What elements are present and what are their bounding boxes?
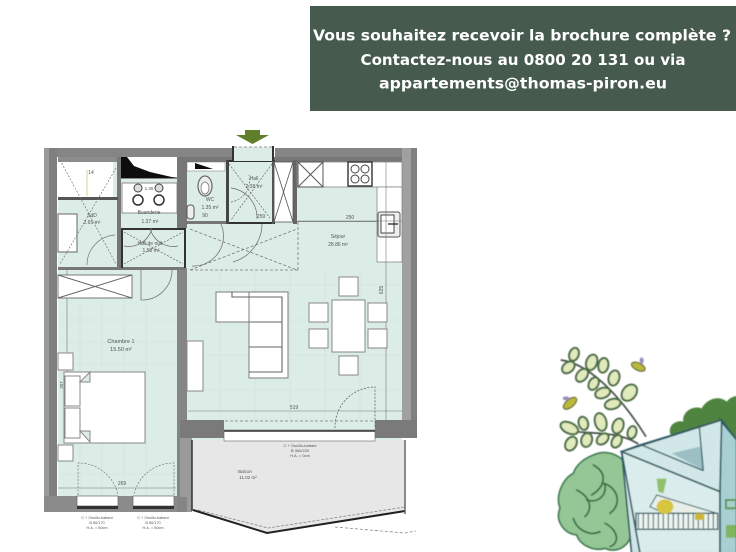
room labels: 259: [257, 214, 265, 220]
dimension lines: [58, 160, 402, 488]
shower room fixtures: [58, 157, 176, 265]
room labels: Chambre 1: [107, 339, 135, 345]
illustration: glass building: [622, 420, 736, 552]
room labels: WC: [206, 197, 215, 203]
contact banner: [310, 6, 736, 111]
illustration: plants and glass building: [559, 346, 736, 552]
side cabinet: [187, 341, 203, 391]
floor plan: [44, 130, 417, 533]
room labels: 2.65 m²: [84, 220, 101, 226]
balcony floor: [192, 440, 405, 533]
room labels: Séjour: [331, 234, 346, 240]
room labels: 1.37 m²: [142, 219, 159, 225]
room labels: 1.35 m²: [202, 205, 219, 211]
icon: hob: [348, 162, 372, 186]
dining table and chairs: [309, 277, 387, 375]
room labels: C + Oscillo-battant: [137, 516, 170, 520]
entrance door: [232, 146, 274, 161]
sofa: [216, 292, 288, 378]
icon: entrance arrow: [236, 130, 269, 144]
room labels: 1.36: [145, 186, 154, 191]
room labels: 11.02 m²: [239, 475, 257, 480]
balcony door and window: [224, 387, 375, 441]
room labels: 90: [202, 213, 208, 219]
icon: sink: [378, 212, 400, 237]
room labels: Hall de nuit: [137, 241, 163, 247]
room labels: 269: [118, 481, 126, 487]
room labels: H.A. = 0cm: [290, 453, 311, 458]
room labels: SdD: [87, 213, 97, 219]
banner text: Vous souhaitez recevoir la brochure complète ?: [313, 26, 731, 44]
room labels: 307: [59, 381, 64, 389]
room labels: Buanderie: [138, 210, 161, 216]
room labels: [59, 170, 385, 530]
bedroom door: [141, 270, 172, 300]
room labels: 14: [88, 170, 94, 176]
room labels: 15.50 m²: [110, 347, 132, 353]
room labels: C + Oscillo-battant: [81, 516, 114, 520]
balcony railing: [192, 440, 416, 533]
faint grid on floor: [60, 270, 400, 495]
outer walls: [44, 148, 417, 512]
room labels: Hall: [250, 176, 258, 182]
inner walls: [58, 157, 402, 270]
banner text: [313, 26, 731, 92]
room labels: 250: [346, 215, 354, 221]
room labels: H.A. = 50cm: [86, 526, 108, 530]
wc: [187, 162, 225, 219]
laundry: washer and dryer: [122, 183, 177, 213]
illustration: tree: [559, 453, 634, 550]
room labels: B 360/220: [291, 448, 310, 453]
room labels: 1.58 m²: [143, 248, 160, 254]
room labels: Balcon: [238, 469, 252, 474]
room labels: 625: [379, 286, 385, 294]
illustration: back foliage: [670, 396, 736, 450]
banner text: appartements@thomas-piron.eu: [379, 74, 667, 92]
bed: [58, 353, 145, 461]
living room rug dashed outline and doors: [190, 222, 298, 270]
night hall doors: [124, 228, 183, 264]
bedroom windows: [77, 463, 174, 509]
floors: [58, 157, 402, 497]
room labels: 2.38 m²: [246, 184, 263, 190]
room labels: B 80/170: [89, 521, 105, 525]
room labels: B 80/170: [145, 521, 161, 525]
room labels: 28.86 m²: [328, 242, 348, 248]
room labels: C + Oscillo-battant: [283, 443, 317, 448]
kitchen counter: [297, 162, 402, 262]
room labels: H.A. = 50cm: [142, 526, 164, 530]
wardrobe: [58, 275, 132, 298]
illustration: branches and leaves: [559, 346, 646, 453]
illustration: bees: [561, 357, 647, 412]
banner text: Contactez-nous au 0800 20 131 ou via: [360, 51, 686, 69]
room labels: 519: [290, 405, 298, 411]
hall closet: [274, 162, 293, 222]
hall doors: [229, 164, 272, 220]
